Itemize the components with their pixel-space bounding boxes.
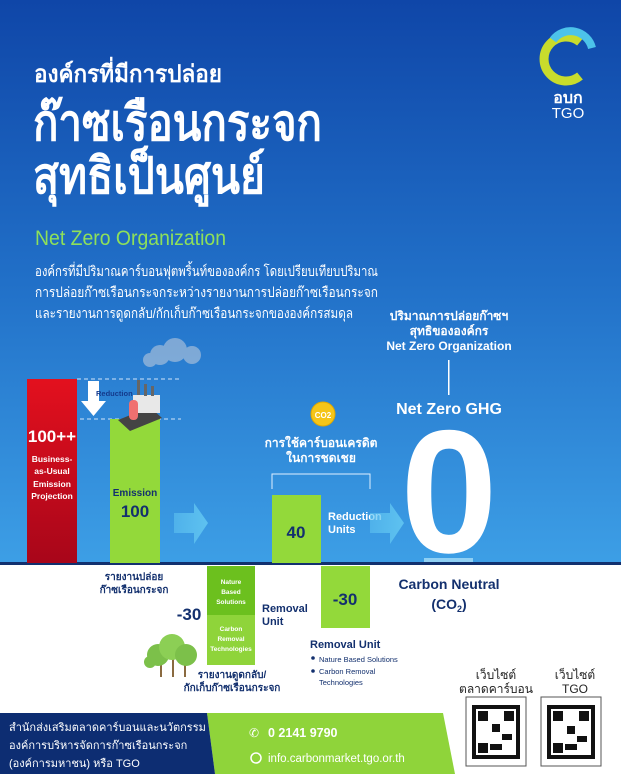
bar: BAU: Emission — [33, 479, 71, 489]
coin: CO2 — [315, 411, 332, 420]
bar: emission: Emission — [113, 488, 157, 499]
footer: องค์การบริหารจัดการก๊าซเรือนกระจก — [9, 739, 187, 752]
emission report caption: รายงานปล่อย — [105, 571, 163, 583]
arrow 2 — [370, 503, 404, 544]
bar: BAU: as-Usual — [34, 466, 70, 476]
trees — [144, 634, 197, 677]
removal block: Based — [221, 589, 241, 596]
background — [0, 0, 621, 565]
bar: 40 — [272, 495, 321, 563]
description: และรายงานการดูดกลับ/กักเก็บก๊าซเรือนกระจกขององค์กรสมดุล — [35, 304, 353, 322]
removal block: Nature — [221, 579, 242, 586]
bar: BAU: Projection — [31, 491, 73, 501]
carbon neutral: (CO — [431, 596, 457, 612]
smoke cloud — [143, 338, 201, 367]
removal block: Carbon — [220, 626, 242, 633]
removal block: Solutions — [216, 599, 246, 606]
removal unit list: Removal Unit — [310, 639, 381, 651]
removal block: Removal — [262, 603, 308, 615]
icon: factory — [118, 380, 162, 431]
net zero org label: Net Zero Organization — [386, 339, 512, 353]
title: สุทธิเป็นศูนย์ — [33, 145, 265, 207]
removal report caption: กักเก็บก๊าซเรือนกระจก — [184, 680, 280, 694]
removal unit list — [310, 639, 398, 687]
reduction arrow: Reduction — [96, 389, 133, 398]
coin — [311, 402, 335, 426]
reduction units — [328, 511, 382, 536]
removal block: Technologies — [210, 646, 252, 653]
description: องค์กรที่มีปริมาณคาร์บอนฟุตพริ้นท์ขององค์กร โดยเปรียบเทียบปริมาณ — [35, 261, 378, 280]
title: องค์กรที่มีการปล่อย — [34, 56, 222, 88]
removal report caption: รายงานดูดกลับ/ — [198, 669, 266, 682]
removal unit list: Nature Based Solutions — [319, 655, 398, 664]
bar: BAU — [27, 379, 77, 563]
bar: emission — [110, 419, 160, 563]
reduction units: Units — [328, 524, 356, 536]
logo: อบก — [553, 90, 583, 107]
footer: 0 2141 9790 — [268, 726, 338, 740]
footer — [0, 713, 455, 774]
net zero org label — [386, 309, 512, 418]
website labels: เว็บไซต์ — [555, 667, 595, 682]
description — [35, 261, 378, 322]
footer: สำนักส่งเสริมตลาดคาร์บอนและนวัตกรรม — [9, 721, 206, 734]
removal block: -30 — [177, 605, 201, 624]
removal report caption — [184, 669, 280, 694]
removal block — [177, 566, 308, 665]
carbon credit label: ในการชดเชย — [286, 450, 356, 465]
logo: TGO — [552, 105, 584, 122]
carbon credit label: การใช้คาร์บอนเครดิต — [265, 435, 378, 450]
bar: -30: -30 — [333, 590, 357, 609]
removal block: Unit — [262, 616, 284, 628]
logo — [544, 31, 592, 122]
footer: ✆ — [249, 726, 259, 740]
reduction arrow — [77, 379, 181, 419]
net zero org label: Net Zero GHG — [396, 401, 502, 418]
bar: -30 — [321, 566, 370, 628]
removal unit list: Carbon Removal — [319, 667, 376, 676]
carbon neutral: ) — [462, 596, 467, 612]
net zero org label: สุทธิขององค์กร — [410, 324, 489, 339]
removal unit list: Technologies — [319, 678, 363, 687]
website labels — [459, 667, 595, 696]
carbon credit label — [265, 435, 378, 489]
title — [33, 56, 322, 207]
footer: (องค์การมหาชน) หรือ TGO — [9, 757, 140, 770]
bar: BAU: 100++ — [28, 427, 76, 446]
carbon neutral — [398, 576, 500, 614]
subtitle: Net Zero Organization — [35, 227, 226, 250]
website labels: เว็บไซต์ — [476, 667, 516, 682]
bar: 40: 40 — [287, 523, 305, 542]
website labels: ตลาดคาร์บอน — [459, 682, 533, 696]
emission report caption — [100, 571, 168, 596]
title: ก๊าซเรือนกระจก — [33, 95, 322, 151]
reduction units: Reduction — [328, 511, 382, 523]
qr codes — [466, 697, 601, 766]
carbon neutral: 2 — [457, 604, 462, 614]
removal block: Removal — [217, 636, 245, 643]
bar: BAU: Business- — [32, 454, 72, 464]
arrow 1 — [174, 503, 208, 544]
website labels: TGO — [562, 682, 588, 696]
description: การปล่อยก๊าซเรือนกระจกระหว่างรายงานการปล่อยก๊าซเรือนกระจก — [35, 284, 378, 300]
net zero org label: ปริมาณการปล่อยก๊าซฯ — [390, 309, 508, 323]
carbon neutral: Carbon Neutral — [398, 576, 500, 592]
bar: emission: 100 — [121, 502, 149, 521]
emission report caption: ก๊าซเรือนกระจก — [100, 584, 168, 596]
footer: info.carbonmarket.tgo.or.th — [268, 753, 405, 765]
big zero: 0 — [400, 395, 498, 590]
